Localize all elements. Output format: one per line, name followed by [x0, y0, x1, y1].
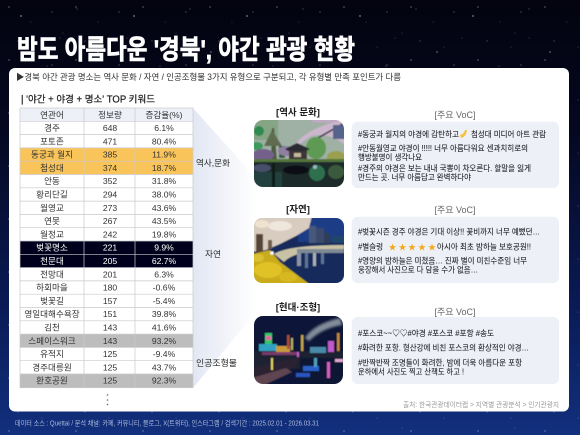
connector fan: table to categories [193, 108, 256, 388]
table rows: 벚꽃명소 [36, 243, 68, 253]
table rows: -0.6% [153, 283, 176, 293]
source note: 출처: 한국관광데이터랩 > 지역별 관광분석 > 인기관광지 [403, 400, 559, 409]
highlighted rows [20, 148, 193, 388]
table rows: 221 [103, 243, 117, 253]
panel: VoC history culture: 행방불명이 생각나요 [358, 152, 422, 162]
panel: VoC history culture: #동궁과 월지의 야경에 감탄하고 [358, 129, 459, 139]
table header: 연관어 [40, 110, 64, 120]
table rows: 62.7% [152, 256, 177, 266]
panel: VoC modern sculpture: #반짝반짝 조명들이 화려한, 밤에 더욱 아름다운 포항 [358, 358, 523, 368]
table rows: 스페이스워크 [28, 336, 76, 346]
table rows: 월정교 [40, 228, 64, 239]
label: VoC 3: [주요 VoC] [434, 307, 476, 317]
table rows: 벚꽃길 [40, 296, 64, 306]
table rows: 352 [103, 176, 117, 186]
table header [20, 108, 193, 121]
table rows: 648 [103, 123, 117, 133]
table rows: 첨성대 [40, 163, 64, 173]
table rows: 151 [103, 309, 117, 319]
panel: VoC history culture: 만드는 곳. 너무 아름답고 완벽하다야 [358, 172, 472, 182]
table rows: 경주대릉원 [32, 361, 72, 372]
title: 밤도 아름다운 '경북', 야간 관광 현황 [17, 35, 355, 65]
table rows: 18.7% [152, 163, 177, 173]
table rows: 93.2% [152, 336, 177, 346]
table rows: 267 [103, 216, 117, 226]
icon: five stars: ★ [388, 243, 396, 252]
table rows: 월영교 [40, 202, 64, 213]
section heading: nature: [자연] [286, 204, 310, 216]
table rows: 천문대 [40, 256, 64, 266]
table rows: 80.4% [152, 136, 177, 146]
table rows: 6.3% [154, 269, 174, 279]
table rows: 연못 [44, 216, 60, 226]
icon: five stars: ★ [418, 243, 426, 252]
table rows: 294 [103, 190, 117, 200]
table rows: 포토존 [40, 136, 64, 146]
table rows: 92.3% [152, 376, 177, 386]
table rows: 125 [103, 362, 117, 372]
table rows: 374 [103, 163, 117, 173]
table rows: 하회마을 [36, 283, 68, 293]
panel: VoC nature: #영양의 밤하늘은 미쳤음… 진짜 별이 미친수준임 너무 [358, 256, 527, 266]
table: top keywords [20, 108, 193, 388]
panel: VoC nature: #별슬렁 [358, 242, 383, 252]
table rows: 김천 [44, 322, 60, 332]
table rows: 205 [103, 256, 117, 266]
panel: VoC nature: #벚꽃시즌 경주 야경은 기대 이상!! 꽃비까지 너무 예뻤던… [358, 226, 540, 236]
panel: VoC modern sculpture: #포스코~~♡♡#야경 #포스코 #포항 #송도 [358, 328, 494, 338]
panel: VoC modern sculpture: 운하에서 사진도 찍고 산책도 하고 ! [358, 366, 464, 376]
table rows: 143 [103, 322, 117, 332]
table rows: 125 [103, 349, 117, 359]
table rows: 6.1% [154, 123, 174, 133]
panel: VoC nature [352, 217, 559, 283]
photo: illuminated steelworks [254, 316, 343, 384]
icon: five stars: ★ [398, 243, 406, 252]
table header: 정보량 [98, 109, 122, 120]
table rows: 273 [103, 203, 117, 213]
panel: VoC nature: 웅장해서 사진으로 다 담을 수가 없음… [358, 264, 478, 274]
table rows: 9.9% [154, 243, 174, 253]
table rows: 동궁과 월지 [31, 149, 73, 160]
table rows: 471 [103, 136, 117, 146]
table rows: 11.9% [152, 150, 176, 160]
table rows: 143 [103, 336, 117, 346]
footer: data source: 데이터 소스 : Quettai / 분석 채널: 카페, 커뮤니티, 블로그, X(트위터), 인스타그램 / 검색기간 : 2025.02.01 - 2026.03.31 [15, 418, 319, 428]
table rows: 환호공원 [36, 375, 68, 386]
table rows: 전망대 [40, 269, 64, 279]
table rows: 242 [103, 229, 117, 239]
table rows: 180 [103, 283, 117, 293]
panel: VoC history culture: #경주의 야경은 보는 내내 국뽕이 차오른다. 할말을 잃게 [358, 163, 531, 173]
section heading: modern sculpture: [현대·조형] [276, 302, 320, 314]
icon: five stars [388, 243, 436, 252]
table rows: -5.4% [153, 296, 176, 306]
table rows: 385 [103, 150, 117, 160]
panel: VoC nature: 아시아 최초 밤하늘 보호공원!! [437, 242, 531, 252]
table rows: 157 [103, 296, 117, 306]
icon: hand emoji [460, 130, 467, 138]
icon: five stars: ★ [428, 243, 436, 252]
panel: main content [9, 68, 569, 412]
table rows: 안동 [44, 176, 60, 186]
table rows: 영일대해수욕장 [24, 309, 80, 319]
panel: VoC history culture: 첨성대 미디어 아트 관람 [471, 129, 547, 139]
table rows: 31.8% [152, 176, 177, 186]
category label: nature: 자연 [205, 249, 221, 259]
table rows: 125 [103, 376, 117, 386]
table rows: 201 [103, 269, 117, 279]
table rows [24, 122, 177, 386]
photo: cherry blossom lakeside [254, 218, 344, 283]
table rows: 41.6% [152, 322, 177, 332]
panel: VoC history culture [352, 122, 559, 188]
section heading: history culture: [역사 문화] [276, 106, 320, 118]
photo: palace pond at night [254, 120, 344, 187]
panel: VoC history culture: #안동월영교 야경이 !!!!! 너무 아름다워요 센과치히로의 [358, 143, 528, 153]
panel: VoC modern sculpture: #화려한 포항. 형산강에 비친 포스코의 환상적인 야경… [358, 342, 529, 352]
subtitle summary: ▶경북 야간 관광 명소는 역사 문화 / 자연 / 인공조형물 3가지 유형으로 구분되고, 각 유형별 만족 포인트가 다름 [16, 71, 401, 82]
ellipsis dots [107, 394, 108, 405]
heading: keyword table: | '야간 + 야경 + 명소' TOP 키워드 [21, 92, 155, 106]
table rows: 유적지 [40, 348, 64, 359]
label: VoC 2: [주요 VoC] [434, 205, 476, 215]
table rows: 43.5% [152, 216, 177, 226]
table rows: 43.6% [152, 203, 177, 213]
table grid [20, 108, 193, 388]
table rows: 19.8% [152, 229, 177, 239]
panel: VoC modern sculpture [352, 317, 559, 384]
table rows: 39.8% [152, 309, 177, 319]
table rows: 43.7% [152, 362, 177, 372]
icon: five stars: ★ [408, 243, 416, 252]
table rows: 38.0% [152, 190, 177, 200]
table rows: -9.4% [153, 349, 176, 359]
table rows: 황리단길 [36, 190, 68, 200]
category label: man-made: 인공조형물 [196, 358, 237, 368]
category label: history culture: 역사,문화 [196, 158, 230, 168]
table rows: 경주 [44, 122, 60, 133]
label: VoC 1: [주요 VoC] [434, 110, 476, 120]
table header: 증감율(%) [145, 109, 183, 120]
